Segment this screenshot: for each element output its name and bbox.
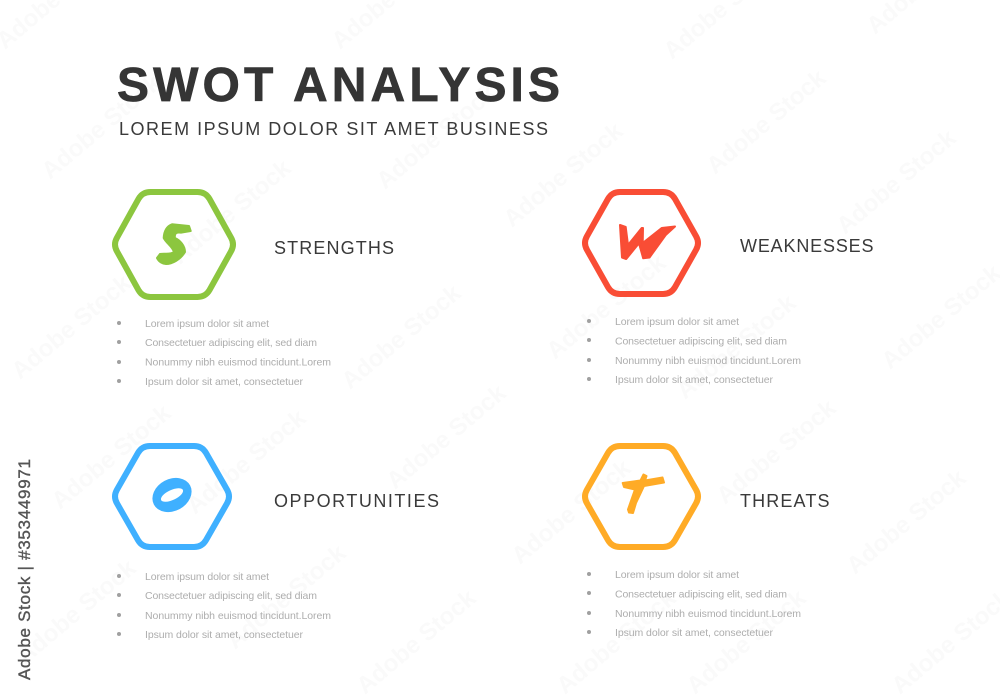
watermark pattern: Adobe Stock: [222, 539, 352, 655]
watermark pattern: Adobe Stock: [842, 464, 972, 580]
list: strengths bullets: Nonummy nibh euismod tincidunt.Lorem: [145, 356, 331, 368]
watermark pattern: Adobe Stock: [832, 124, 962, 240]
list: opportunities bullets: Nonummy nibh euismod tincidunt.Lorem: [145, 610, 331, 622]
icon: red hexagon with W: [585, 192, 698, 294]
list: strengths bullets: Ipsum dolor sit amet, consectetuer: [145, 376, 304, 388]
stock credit: Adobe Stock | #353449971: [15, 459, 34, 680]
subtitle: LOREM IPSUM DOLOR SIT AMET BUSINESS: [119, 119, 548, 139]
list: opportunities bullets: Lorem ipsum dolor sit amet: [145, 571, 269, 583]
watermark pattern: Adobe Stock: [182, 404, 312, 520]
heading: strengths: STRENGTHS: [274, 238, 394, 258]
watermark pattern: Adobe Stock: [337, 279, 467, 395]
list: weaknesses bullets: Lorem ipsum dolor sit amet: [615, 316, 739, 328]
list: threats bullets: Ipsum dolor sit amet, consectetuer: [615, 627, 774, 639]
list: threats bullets: Nonummy nibh euismod tincidunt.Lorem: [615, 608, 801, 620]
watermark pattern: Adobe Stock: [542, 249, 672, 365]
list: threats bullets: Lorem ipsum dolor sit amet: [615, 569, 739, 581]
list: weaknesses bullets: Consectetuer adipiscing elit, sed diam: [615, 336, 787, 348]
watermark pattern: Adobe Stock: [12, 554, 142, 670]
list: weaknesses bullets: Ipsum dolor sit amet, consectetuer: [615, 374, 774, 386]
panel: opportunities: [115, 446, 439, 641]
heading: opportunities: OPPORTUNITIES: [274, 491, 439, 511]
watermark pattern: Adobe Stock: [712, 394, 842, 510]
list: opportunities bullets: Ipsum dolor sit amet, consectetuer: [145, 629, 304, 641]
list: threats bullets: [587, 569, 801, 639]
list: strengths bullets: Consectetuer adipiscing elit, sed diam: [145, 337, 317, 349]
icon: blue hexagon with O: [115, 446, 229, 547]
list: threats bullets: Consectetuer adipiscing elit, sed diam: [615, 588, 787, 600]
list: strengths bullets: Lorem ipsum dolor sit amet: [145, 318, 269, 330]
watermark pattern: Adobe Stock: [499, 117, 629, 233]
watermark pattern: Adobe Stock: [372, 79, 502, 195]
panel: strengths: [115, 192, 394, 388]
title: SWOT ANALYSIS: [117, 59, 560, 112]
watermark pattern: Adobe Stock: [7, 269, 137, 385]
watermark pattern: Adobe Stock: [702, 64, 832, 180]
heading: threats: THREATS: [740, 491, 830, 511]
panel: threats: [585, 446, 830, 639]
icon: green hexagon with S: [115, 192, 233, 297]
watermark pattern: Adobe Stock: [507, 454, 637, 570]
icon: orange hexagon with T: [585, 446, 698, 547]
list: strengths bullets: [117, 318, 331, 388]
heading: weaknesses: WEAKNESSES: [740, 236, 874, 256]
list: opportunities bullets: Consectetuer adipiscing elit, sed diam: [145, 590, 317, 602]
watermark pattern: Adobe Stock: [47, 399, 177, 515]
watermark pattern: Adobe Stock: [37, 69, 167, 185]
watermark pattern: Adobe Stock: [672, 289, 802, 405]
watermark pattern: Adobe Stock: [167, 154, 297, 270]
panel: weaknesses: [585, 192, 874, 386]
watermark pattern: Adobe Stock: [382, 379, 512, 495]
list: opportunities bullets: [117, 571, 331, 641]
list: weaknesses bullets: Nonummy nibh euismod tincidunt.Lorem: [615, 355, 801, 367]
list: weaknesses bullets: [587, 316, 801, 386]
